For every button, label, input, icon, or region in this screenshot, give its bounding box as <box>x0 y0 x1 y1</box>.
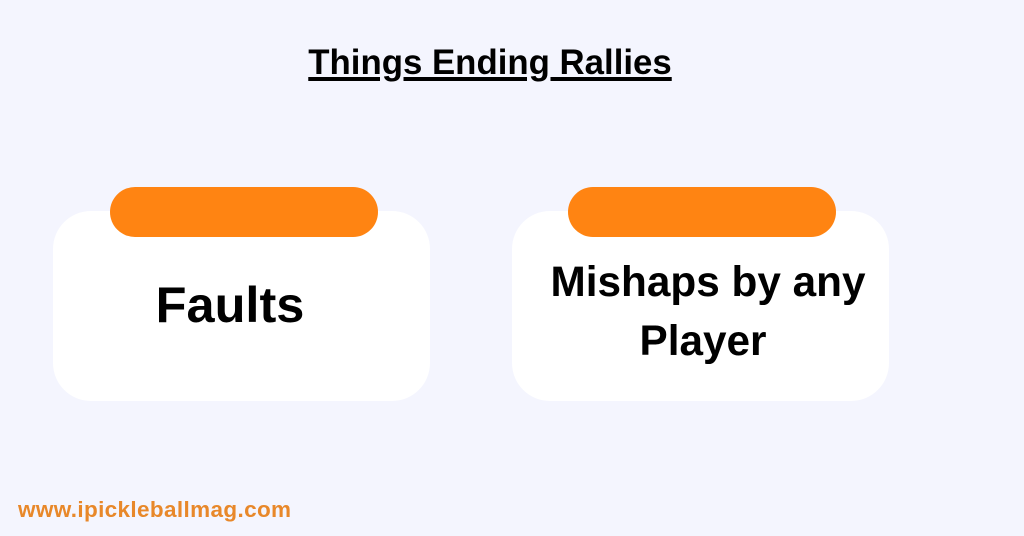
panel: faults <box>53 187 430 401</box>
label: mishaps <box>550 258 866 364</box>
title: Things Ending Rallies <box>308 43 672 82</box>
panel: mishaps <box>512 187 889 401</box>
label: faults: Faults <box>156 276 304 333</box>
card: faults <box>53 211 430 401</box>
card: mishaps <box>512 211 889 401</box>
orange tab: faults <box>110 187 378 237</box>
website url: www.ipickleballmag.com <box>18 497 291 522</box>
label: mishaps: Player <box>640 317 766 364</box>
label: mishaps: Mishaps by any <box>550 258 865 305</box>
orange tab: mishaps <box>568 187 836 237</box>
